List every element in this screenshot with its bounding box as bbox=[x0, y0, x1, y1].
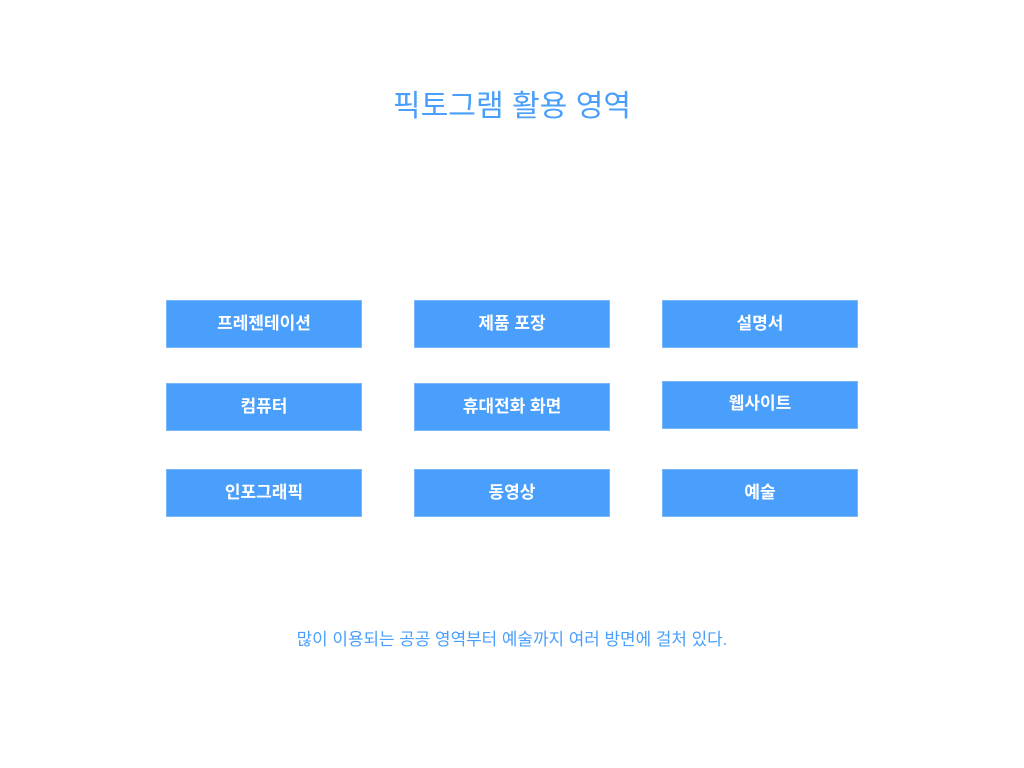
button: manual: 설명서 bbox=[737, 314, 783, 333]
button: art bbox=[662, 469, 858, 517]
button: video bbox=[414, 469, 610, 517]
caption: 많이 이용되는 공공 영역부터 예술까지 여러 방면에 걸처 있다. bbox=[297, 630, 727, 649]
button: art: 예술 bbox=[744, 483, 776, 502]
button: presentation: 프레젠테이션 bbox=[217, 314, 311, 333]
button: presentation bbox=[166, 300, 362, 348]
button: video: 동영상 bbox=[489, 483, 535, 502]
button: manual bbox=[662, 300, 858, 348]
button: computer bbox=[166, 383, 362, 431]
button: infographic: 인포그래픽 bbox=[225, 483, 303, 502]
button: website: 웹사이트 bbox=[729, 394, 791, 413]
button: product packaging bbox=[414, 300, 610, 348]
button: computer: 컴퓨터 bbox=[241, 397, 287, 416]
title: 픽토그램 활용 영역 bbox=[393, 90, 631, 123]
button: website bbox=[662, 381, 858, 429]
button: mobile phone screen bbox=[414, 383, 610, 431]
button: product packaging: 제품 포장 bbox=[478, 314, 546, 333]
button: mobile phone screen: 휴대전화 화면 bbox=[463, 397, 561, 416]
button: infographic bbox=[166, 469, 362, 517]
